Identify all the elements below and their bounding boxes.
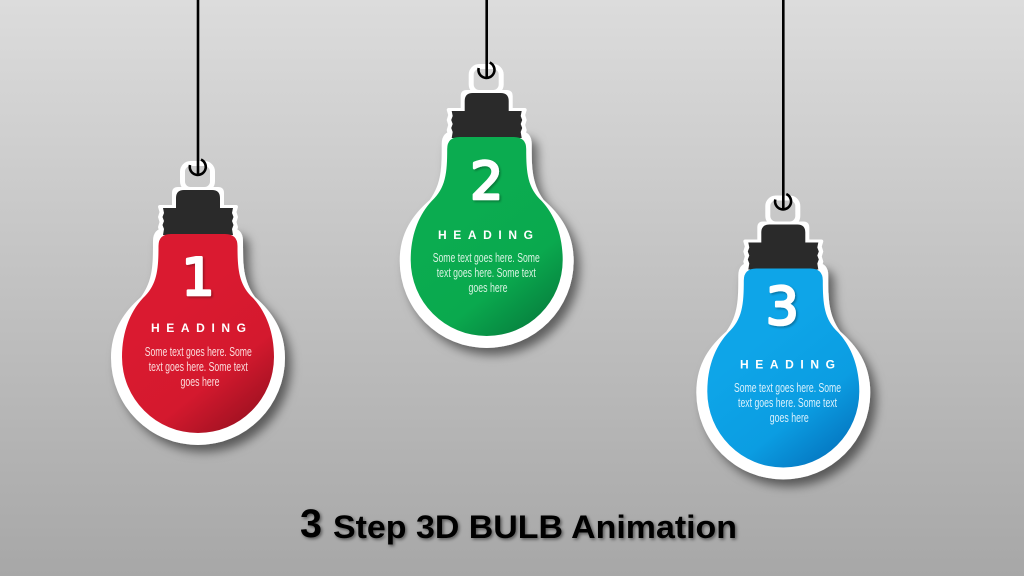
cord and hook: [775, 0, 791, 210]
white sticker outline: [111, 228, 285, 445]
bulb 1: red: [111, 0, 285, 445]
white sticker outline: [696, 262, 870, 479]
body text: goes here: [180, 375, 220, 389]
body text: text goes here. Some text: [738, 396, 837, 410]
heading: HEADING: [438, 228, 533, 242]
body text: Some text goes here. Some: [145, 345, 252, 359]
number: 3: [766, 278, 799, 338]
lamp cap: [451, 93, 522, 138]
white cap outline: [743, 198, 823, 270]
glass: [122, 234, 274, 433]
number: 1: [181, 248, 215, 308]
white cap outline: [447, 66, 527, 139]
body text: text goes here. Some text: [437, 266, 536, 280]
white sticker outline: [400, 131, 574, 348]
number: 2: [470, 152, 503, 212]
bulb 2: green: [400, 0, 574, 348]
title: 3: [300, 502, 322, 546]
body text: Some text goes here. Some: [734, 381, 841, 395]
title: Step 3D BULB Animation: [333, 509, 737, 545]
body text: text goes here. Some text: [149, 360, 248, 374]
white cap outline: [158, 164, 238, 236]
heading: HEADING: [740, 358, 835, 372]
lamp cap: [748, 224, 819, 270]
body text: goes here: [469, 281, 508, 295]
body text: Some text goes here. Some: [433, 251, 540, 265]
bulb 3: blue: [696, 0, 870, 479]
glass: [411, 137, 563, 336]
cord and hook: [190, 0, 206, 175]
glass: [707, 268, 859, 468]
lamp cap: [162, 190, 234, 235]
cord and hook: [478, 0, 494, 78]
body text: goes here: [770, 411, 809, 425]
heading: HEADING: [151, 321, 246, 335]
